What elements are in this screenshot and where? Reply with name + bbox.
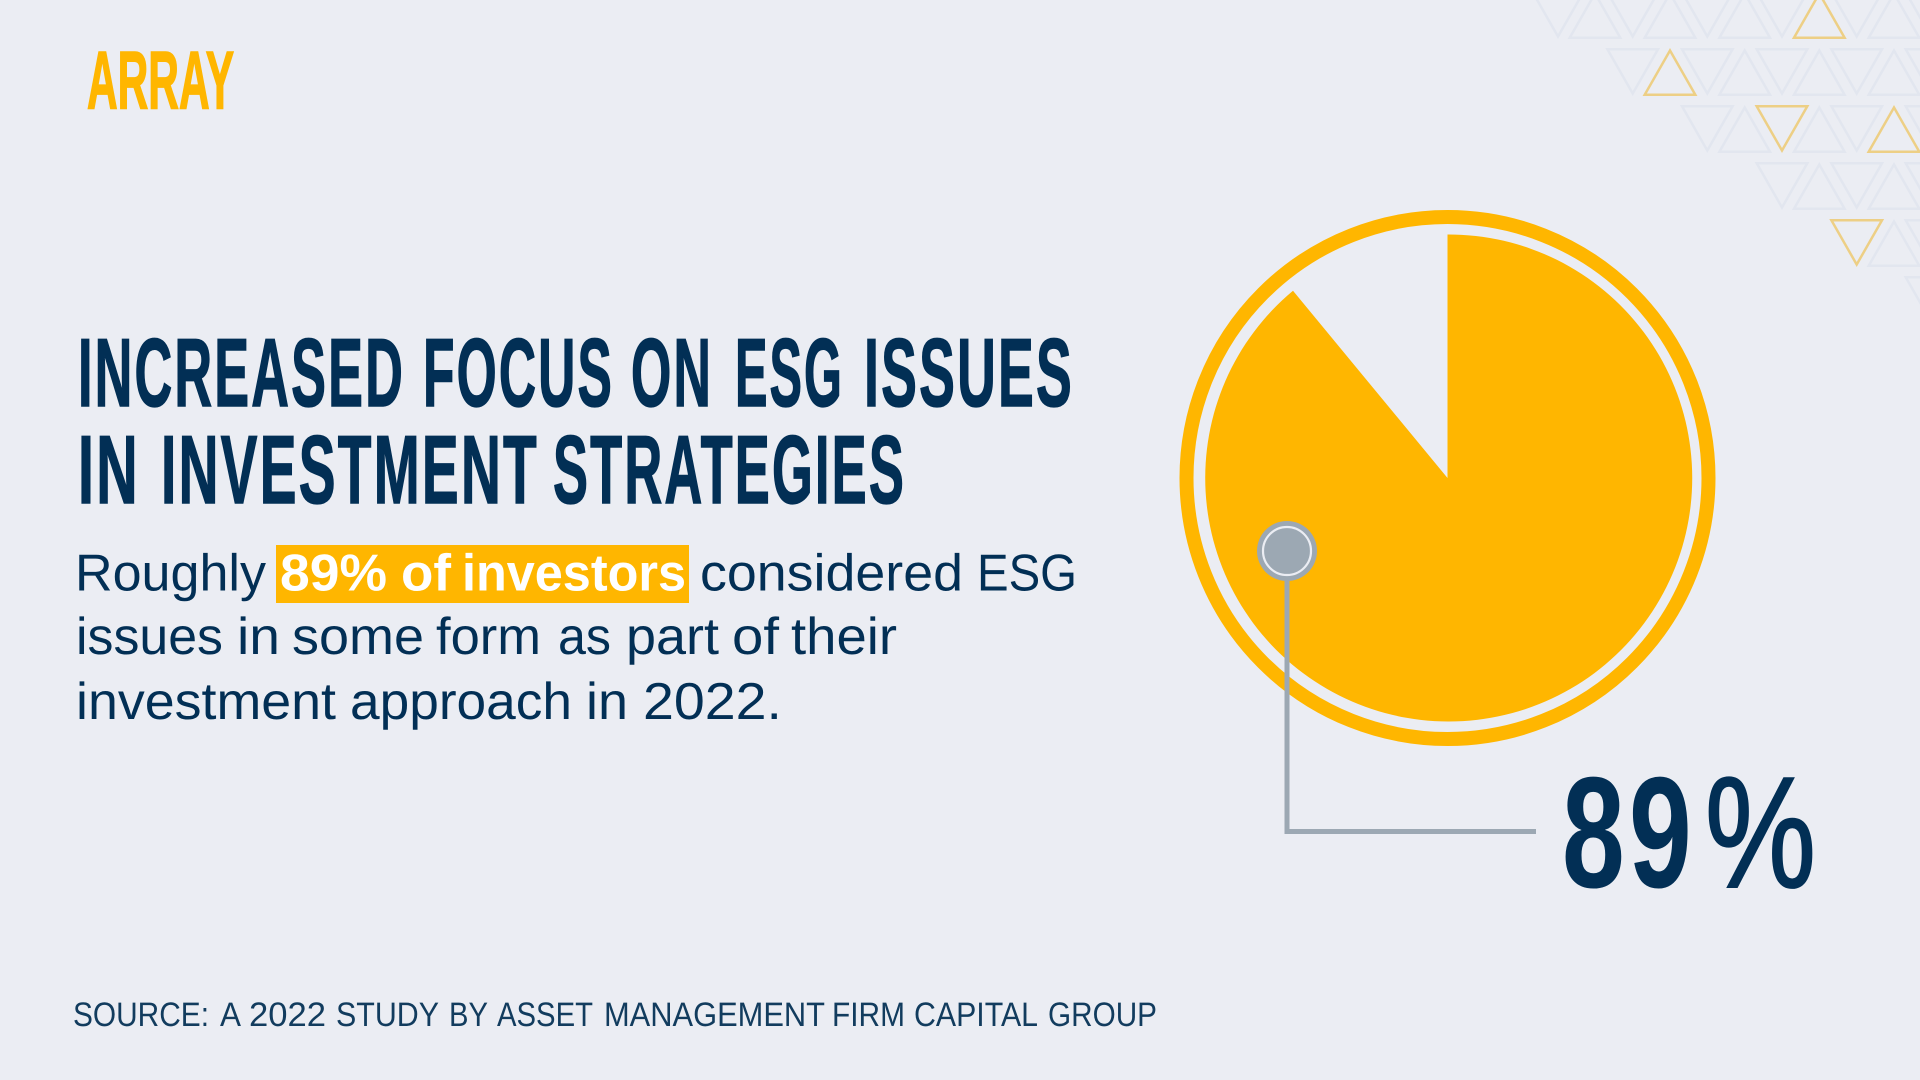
- source note: SOURCE:: [73, 996, 209, 1034]
- leader line: [1287, 570, 1536, 832]
- big number: 89%: 89: [1562, 745, 1696, 921]
- body line 3: investment: [76, 673, 337, 731]
- source note: MANAGEMENT: [604, 996, 825, 1034]
- body line 2: some: [292, 608, 424, 666]
- source note: ASSET: [497, 996, 593, 1034]
- body line 3: [76, 673, 782, 731]
- heading line 1: INCREASED: [78, 318, 405, 427]
- body paragraph: [75, 544, 1077, 731]
- source note: [73, 996, 1157, 1034]
- heading line 1: ON: [631, 318, 713, 427]
- source note: 2022: [249, 996, 326, 1034]
- source note: A: [220, 996, 241, 1034]
- body line 2: form: [436, 608, 541, 666]
- highlighted text: 89%: [280, 544, 387, 602]
- heading line 2: IN: [78, 415, 140, 524]
- body line 2: as: [558, 608, 611, 666]
- heading line 2: STRATEGIES: [553, 415, 906, 524]
- body line 2: [76, 608, 897, 666]
- pie slice: [1205, 234, 1692, 721]
- heading line 2: INVESTMENT: [161, 415, 539, 524]
- body line 3: approach: [350, 673, 572, 731]
- callout: leader line and marker: [1257, 521, 1536, 832]
- source note: GROUP: [1048, 996, 1157, 1034]
- body line 3: in: [586, 673, 628, 731]
- body line 1 end: ESG: [977, 544, 1077, 602]
- body line 2: issues: [76, 608, 223, 666]
- heading line 1: ESG: [735, 318, 844, 427]
- body line 2: of: [732, 608, 780, 666]
- source note: STUDY: [336, 996, 439, 1034]
- body line 1 end: considered: [700, 544, 963, 602]
- logo: ARRAY: ARRAY: [87, 36, 234, 126]
- marker dot: [1257, 521, 1317, 581]
- body line 2: in: [237, 608, 280, 666]
- source note: BY: [449, 996, 488, 1034]
- highlight bar: [276, 545, 689, 603]
- triangle pattern: top right: [1533, 0, 1920, 322]
- heading line 1: ISSUES: [864, 318, 1074, 427]
- body line 2: part: [626, 608, 720, 666]
- heading line 1: [78, 318, 1074, 427]
- source note: CAPITAL: [914, 996, 1038, 1034]
- heading line 1: FOCUS: [423, 318, 614, 427]
- body line 3: 2022.: [643, 673, 782, 731]
- pie chart: 89%: [1186, 217, 1708, 739]
- heading: [78, 318, 1074, 524]
- highlighted text: of: [401, 544, 452, 602]
- highlighted text: [280, 544, 686, 602]
- source note: FIRM: [832, 996, 905, 1034]
- body line 1 end: [700, 544, 1077, 602]
- body line 2: their: [791, 608, 897, 666]
- outer ring: [1186, 217, 1708, 739]
- big number: 89%: %: [1705, 745, 1816, 921]
- body line 1 start: Roughly: [75, 544, 266, 602]
- highlighted text: investors: [462, 544, 686, 602]
